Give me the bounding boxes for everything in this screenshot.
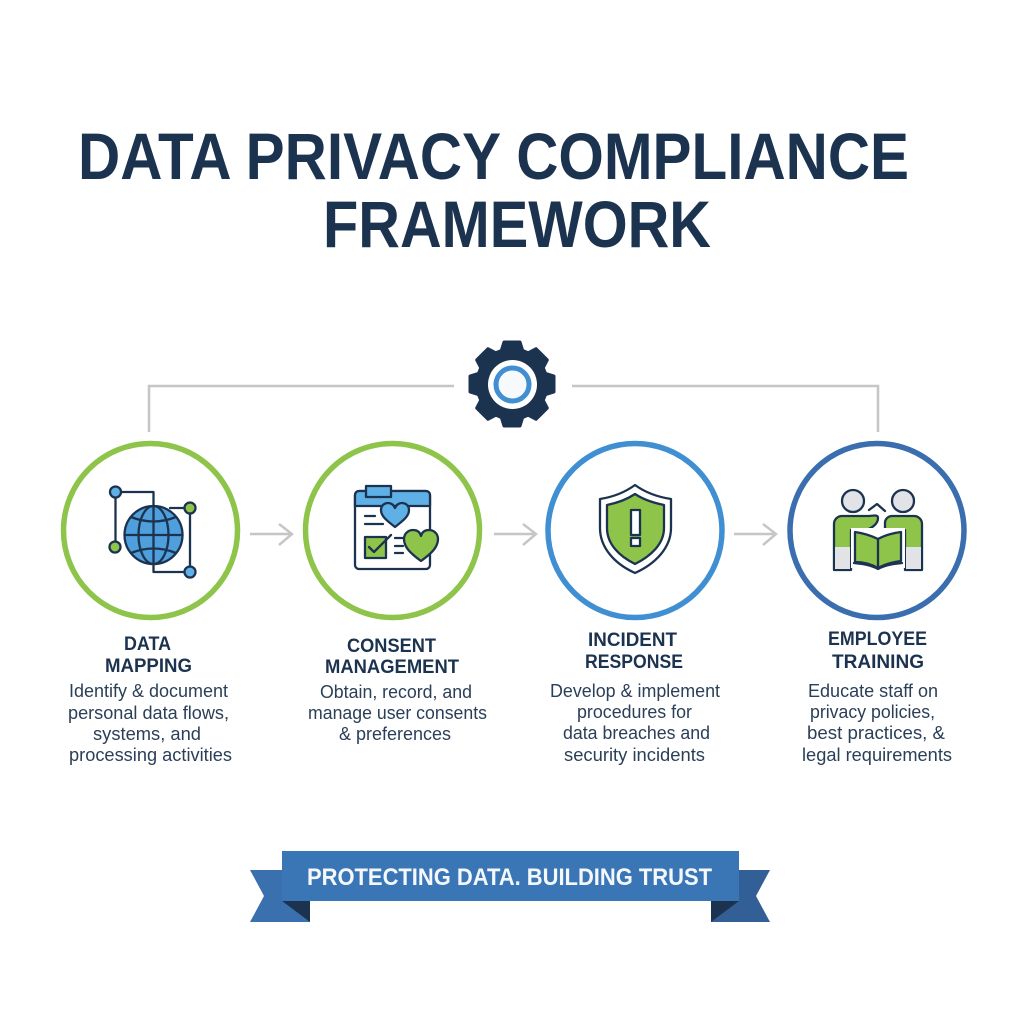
heading: incident response: RESPONSE [585, 651, 683, 673]
heading: consent management [325, 635, 459, 678]
text: incident response description: Develop & implement [550, 681, 720, 701]
arrow 3 [734, 524, 776, 545]
icon: globe network [110, 486, 196, 578]
text: data mapping description: Identify & document [69, 681, 228, 701]
text: data mapping description [68, 681, 232, 765]
title: DATA PRIVACY COMPLIANCE [78, 119, 909, 193]
text: incident response description: procedures for [577, 702, 692, 722]
heading: incident response [585, 629, 683, 673]
arrow 1 [250, 524, 292, 545]
text: consent management description [308, 682, 487, 744]
text: data mapping description: processing activities [69, 745, 232, 765]
text: consent management description: manage user consents [308, 703, 487, 723]
ribbon left tail [250, 870, 310, 922]
circle: employee training [790, 444, 964, 618]
heading: data mapping: DATA [124, 633, 171, 655]
text: consent management description: Obtain, record, and [320, 682, 472, 702]
circle: incident response [548, 444, 722, 618]
icon: shield with alert [600, 485, 671, 573]
text: incident response description: data breaches and [563, 723, 710, 743]
title: FRAMEWORK [323, 187, 711, 261]
heading: data mapping [105, 633, 192, 677]
icon: people with book [834, 490, 922, 570]
connector lines from gear [149, 386, 878, 432]
step 4: employee training [790, 444, 964, 765]
text: consent management description: & preferences [339, 724, 451, 744]
heading: employee training [828, 628, 927, 673]
heading: data mapping: MAPPING [105, 655, 192, 677]
step 2: consent management [306, 444, 487, 744]
ribbon folds [282, 901, 310, 922]
ribbon main band [282, 851, 739, 901]
circle: consent management [306, 444, 480, 618]
heading: incident response: INCIDENT [588, 629, 677, 651]
text: employee training description: legal requirements [802, 745, 952, 765]
text: incident response description: security incidents [564, 745, 705, 765]
text: data mapping description: personal data flows, [68, 703, 229, 723]
ribbon right tail [711, 870, 770, 922]
step 3: incident response [548, 444, 722, 765]
text: employee training description: best practices, & [807, 723, 945, 743]
icon: consent form with hearts [355, 486, 438, 569]
heading: employee training: TRAINING [832, 651, 924, 673]
heading: employee training: EMPLOYEE [828, 628, 927, 650]
step 1: data mapping [64, 444, 238, 765]
text: incident response description [550, 681, 720, 765]
text: employee training description [802, 681, 952, 765]
heading: consent management: MANAGEMENT [325, 656, 459, 678]
circle: data mapping [64, 444, 238, 618]
title [78, 119, 909, 261]
heading: consent management: CONSENT [347, 635, 436, 657]
text: data mapping description: systems, and [93, 724, 201, 744]
text: employee training description: privacy policies, [810, 702, 935, 722]
icon: gear [470, 342, 554, 426]
banner ribbon [250, 851, 770, 922]
banner text: PROTECTING DATA. BUILDING TRUST [307, 864, 712, 891]
text: employee training description: Educate staff on [808, 681, 938, 701]
arrow 2 [494, 524, 536, 545]
